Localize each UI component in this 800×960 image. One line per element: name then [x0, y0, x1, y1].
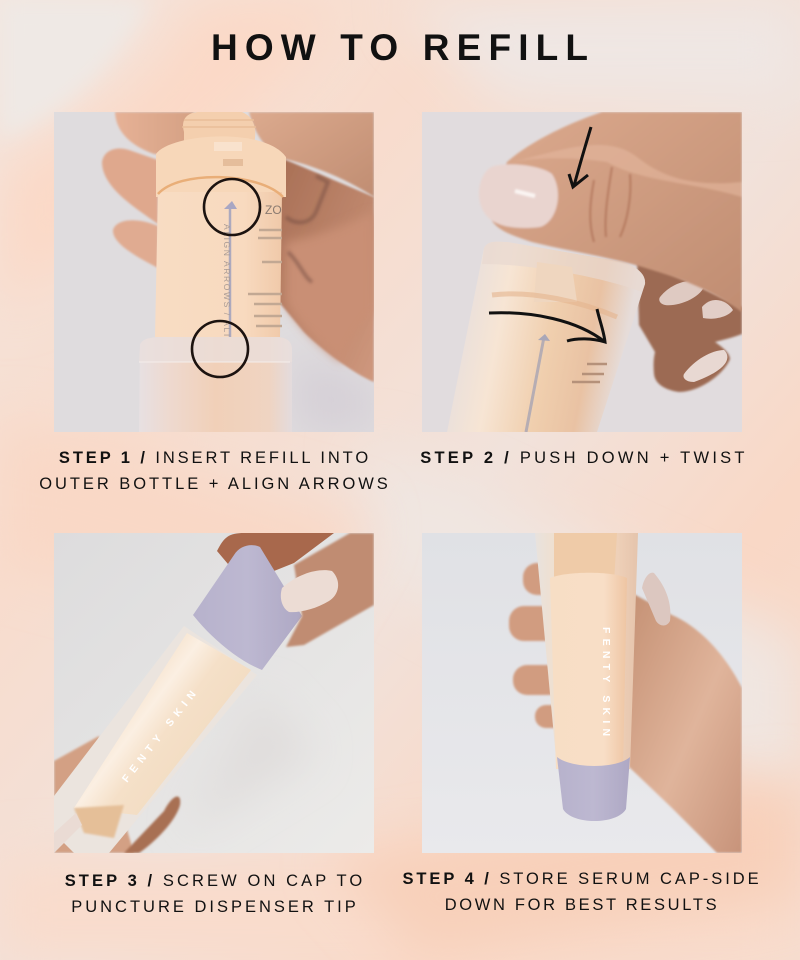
icon: finger nails — [54, 813, 82, 853]
title: HOW TO REFILL — [211, 27, 595, 68]
refill tube: ZO — [265, 203, 282, 217]
panel: step 4 photo — [422, 533, 742, 853]
caption: step 4: STEP 4 / STORE SERUM CAP-SIDE — [402, 870, 762, 888]
caption: step 1: STEP 1 / INSERT REFILL INTO — [59, 449, 371, 467]
icon: hand — [627, 593, 742, 853]
panel: step 1 photo — [54, 112, 374, 432]
refill tube: ALIGN ARROWS / ALIGNER LES — [222, 224, 232, 394]
caption: step 4 — [402, 870, 762, 914]
caption: step 3: PUNCTURE DISPENSER TIP — [71, 898, 359, 916]
caption: step 4: DOWN FOR BEST RESULTS — [445, 896, 719, 914]
panel: step 3 photo — [54, 533, 374, 853]
outer bottle — [139, 337, 292, 432]
icon: lavender cap — [557, 757, 630, 821]
arrow: twist — [489, 309, 605, 342]
product label: FENTY SKIN: FENTY SKIN — [120, 684, 202, 785]
callout: circled arrows — [192, 179, 260, 377]
bottle — [535, 533, 638, 769]
caption: step 3 — [65, 872, 365, 916]
icon: lavender cap — [193, 545, 302, 670]
caption: step 1: OUTER BOTTLE + ALIGN ARROWS — [39, 475, 391, 493]
icon: fingers behind bottle — [508, 562, 554, 730]
product label: FENTY SKIN: FENTY SKIN — [600, 627, 612, 741]
icon: thumb — [479, 112, 742, 312]
outer bottle with refill — [447, 242, 645, 432]
icon: hand behind cap — [217, 533, 334, 571]
caption: step 3: STEP 3 / SCREW ON CAP TO — [65, 872, 365, 890]
arrow: push down — [569, 127, 591, 187]
icon: upper hand — [281, 533, 374, 647]
caption: step 1 — [39, 449, 391, 493]
refill tube — [155, 112, 286, 337]
icon: hand holding refill — [102, 112, 374, 382]
bottle — [54, 626, 257, 853]
caption: step 2: STEP 2 / PUSH DOWN + TWIST — [420, 449, 748, 467]
icon: lower hand — [54, 736, 180, 853]
icon: finger nail — [642, 573, 670, 626]
panel: step 2 photo — [422, 112, 742, 432]
icon: lower fingers — [637, 257, 742, 392]
